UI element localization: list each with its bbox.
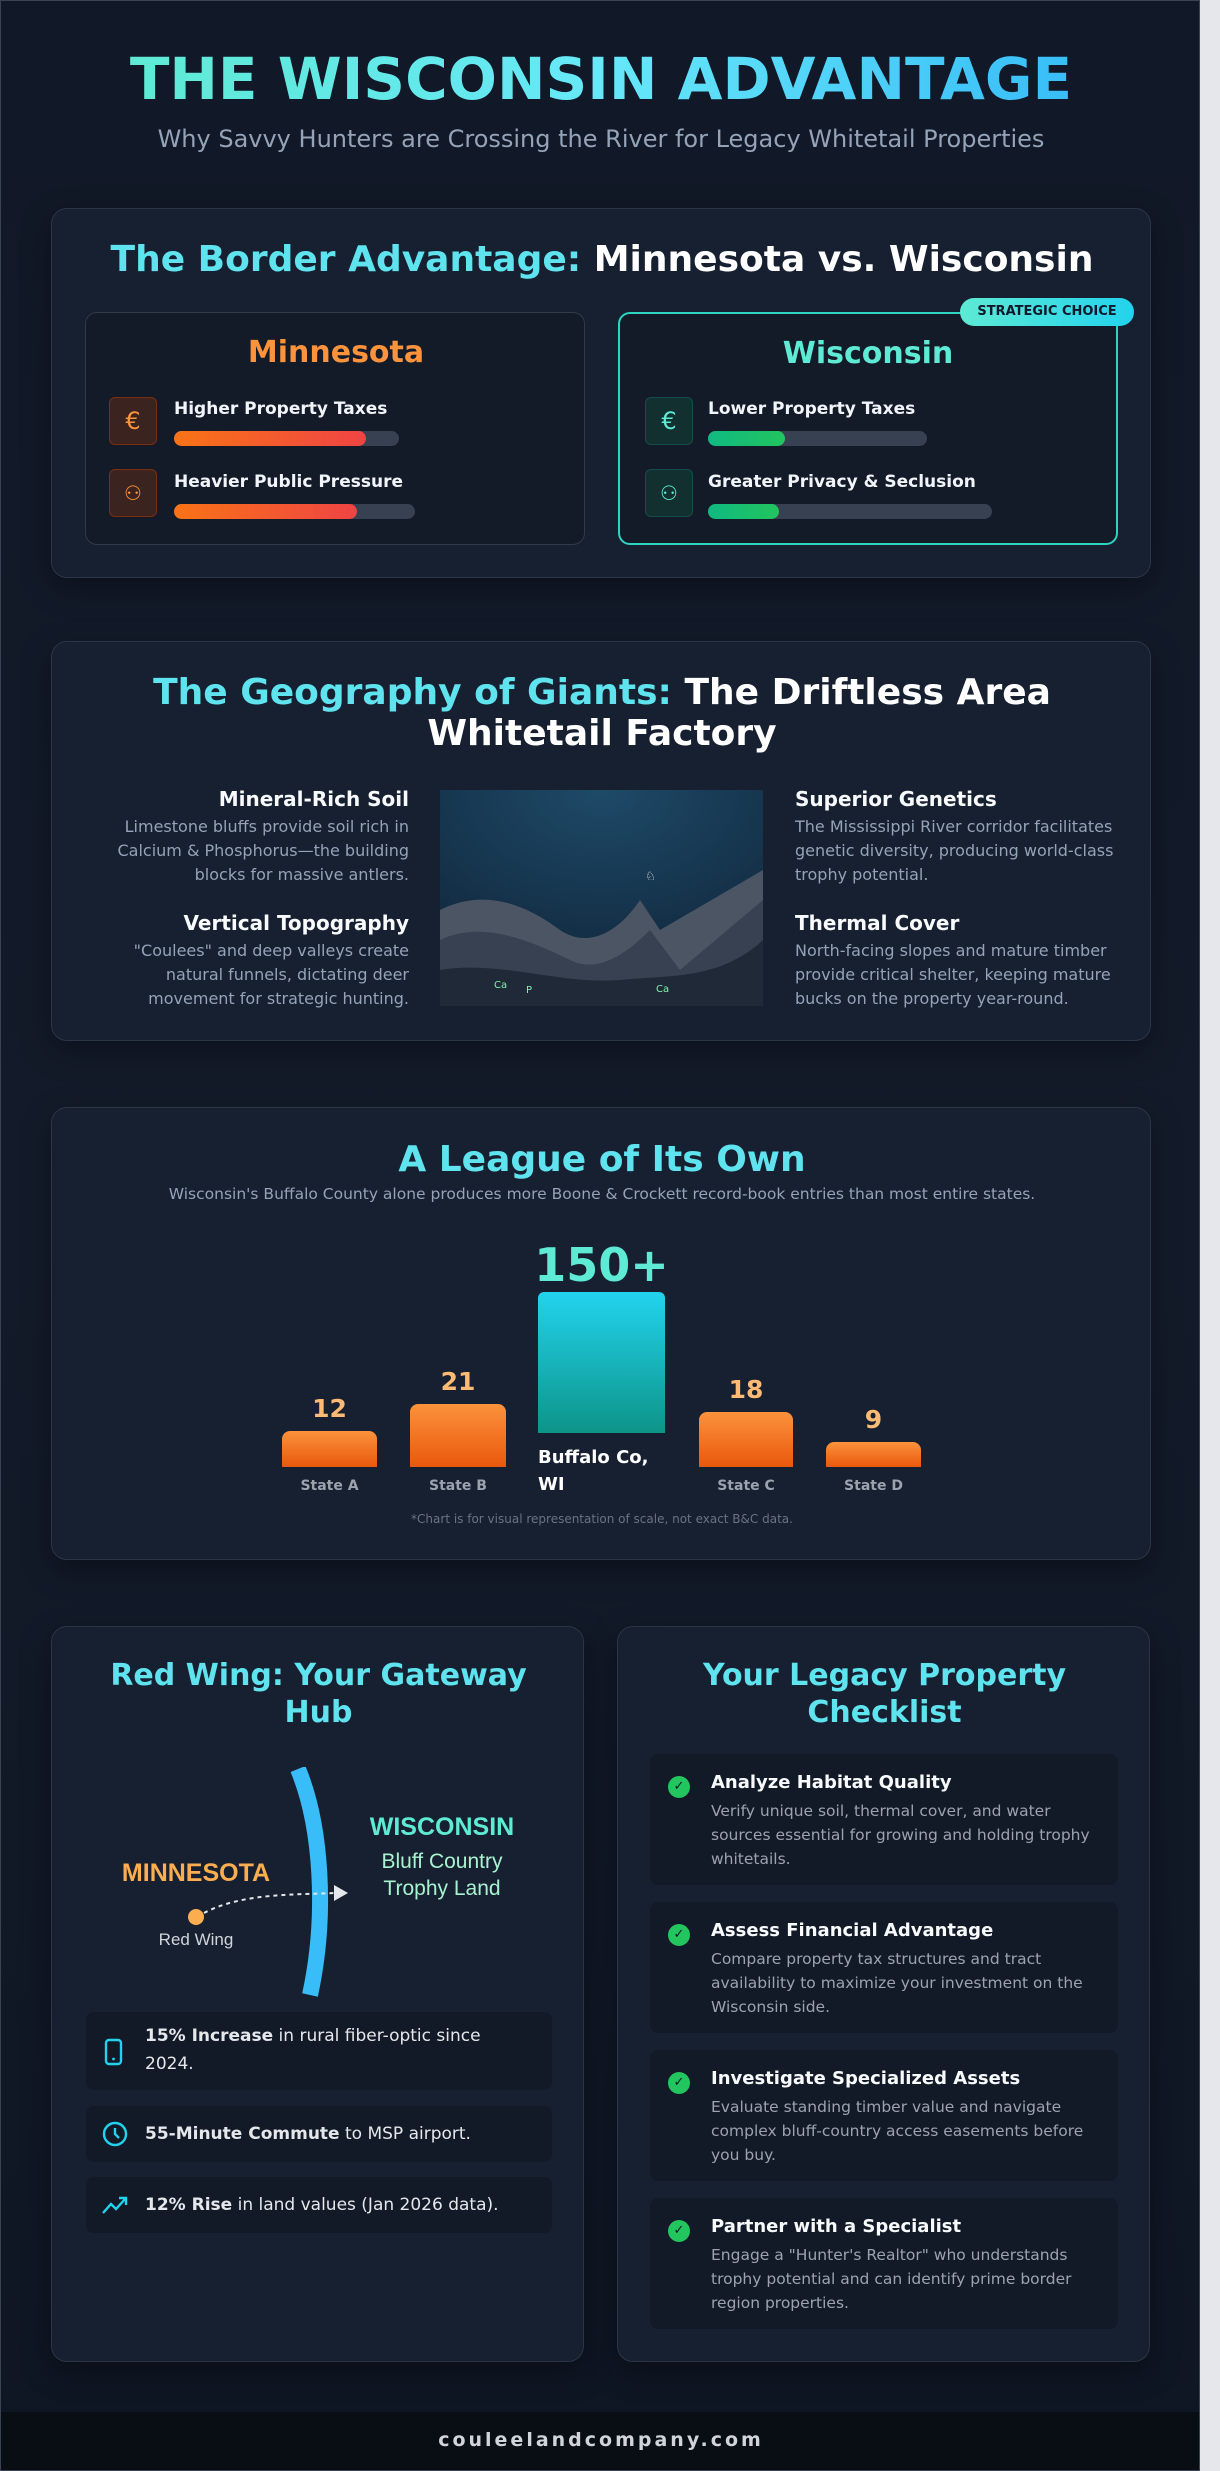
illustration: driftless terrain: ♘ (645, 869, 656, 883)
bar chart: State D (844, 1478, 903, 1494)
icon: euro (645, 397, 693, 445)
item: assets: Investigate Specialized Assets (711, 2068, 1020, 2089)
row: higher taxes: Higher Property Taxes (174, 399, 387, 419)
bar chart: 21 (441, 1367, 475, 1396)
panel: red wing (51, 1626, 584, 2362)
stat: commute: 55-Minute Commute to MSP airport. (145, 2124, 471, 2144)
icon: phone (104, 2038, 122, 2066)
item: specialist: Partner with a Specialist (711, 2216, 961, 2237)
stat: land values (86, 2177, 552, 2233)
illustration: driftless terrain (440, 790, 763, 1006)
badge: strategic choice: STRATEGIC CHOICE (977, 304, 1117, 319)
item: financial (650, 1902, 1118, 2033)
item: financial: Assess Financial Advantage (711, 1920, 993, 1941)
bar chart: 150+ (534, 1238, 669, 1292)
subtitle: league: Wisconsin's Buffalo County alone produces more Boone & Crockett record-book entries than most entire states. (169, 1185, 1035, 1203)
stat: fiber optic: 15% Increase in rural fiber-optic since 2024. (145, 2026, 481, 2074)
map: river crossing: Red Wing (159, 1930, 233, 1949)
icon: people: ⚇ (124, 481, 142, 505)
badge: strategic choice (960, 298, 1134, 326)
row: public pressure (174, 472, 415, 519)
panel: league of its own (51, 1107, 1151, 1560)
panel: geography (51, 641, 1151, 1041)
row: lower taxes (708, 399, 927, 446)
bar chart: 12 (312, 1394, 347, 1423)
heading: geography (153, 672, 1051, 754)
heading: border advantage: The Border Advantage: Minnesota vs. Wisconsin (111, 239, 1093, 280)
bar chart: 18 (729, 1375, 763, 1404)
heading: league: A League of Its Own (398, 1139, 806, 1180)
bar chart: Buffalo Co, (538, 1447, 648, 1468)
stat: land values: 12% Rise in land values (Jan 2026 data). (145, 2195, 499, 2215)
map: river crossing: MINNESOTA (122, 1859, 270, 1887)
heading: geography: Whitetail Factory (427, 713, 777, 754)
feature: genetics: Superior Genetics (795, 787, 997, 811)
row: privacy (708, 472, 992, 519)
card: minnesota (85, 312, 585, 545)
footnote: *Chart is for visual representation of scale, not exact B&C data. (411, 1512, 793, 1526)
bar chart: State B (429, 1478, 487, 1494)
item: habitat: Verify unique soil, thermal cover, and water sources essential for growing and holding trophy whitetails. (711, 1802, 1090, 1868)
item: specialist: Engage a "Hunter's Realtor" who understands trophy potential and can identify prime border region properties. (711, 2246, 1072, 2312)
item: financial: ✓ (674, 1927, 684, 1942)
item: financial: Compare property tax structures and tract availability to maximize your investment on the Wisconsin side. (711, 1950, 1083, 2016)
heading: wisconsin: Wisconsin (783, 336, 953, 371)
icon: people (109, 469, 157, 517)
icon: euro: € (661, 407, 677, 435)
feature: topography: "Coulees" and deep valleys create natural funnels, dictating deer movement for strategic hunting. (134, 941, 409, 1008)
map: river crossing (122, 1767, 514, 1997)
feature: mineral soil: Mineral-Rich Soil (219, 787, 409, 811)
panel: border advantage (51, 208, 1151, 578)
feature: thermal cover: Thermal Cover (795, 911, 959, 935)
icon: clock (102, 2122, 128, 2146)
feature: mineral soil (117, 787, 409, 884)
map: river crossing: WISCONSIN (370, 1813, 514, 1841)
footer: couleelandcompany.com (438, 2429, 764, 2451)
row: lower taxes: Lower Property Taxes (708, 399, 915, 419)
heading: minnesota: Minnesota (248, 335, 424, 370)
bar chart: State C (717, 1478, 775, 1494)
feature: thermal cover (795, 911, 1111, 1008)
row: public pressure: Heavier Public Pressure (174, 472, 403, 492)
item: habitat: Analyze Habitat Quality (711, 1772, 952, 1793)
icon: euro (109, 397, 157, 445)
card: wisconsin (618, 312, 1118, 545)
map: river crossing: Bluff Country (381, 1850, 503, 1873)
bar chart: WI (538, 1474, 565, 1495)
icon: people: ⚇ (660, 481, 678, 505)
item: habitat: ✓ (674, 1779, 684, 1794)
stat: commute (86, 2106, 552, 2162)
item: habitat (650, 1754, 1118, 1885)
feature: mineral soil: Limestone bluffs provide soil rich in Calcium & Phosphorus—the building blocks for massive antlers. (117, 817, 409, 884)
illustration: driftless terrain: Ca (494, 980, 507, 991)
row: higher taxes (174, 399, 399, 446)
heading: checklist: Your Legacy Property Checklist (703, 1658, 1066, 1730)
icon: euro: € (125, 407, 141, 435)
footer (1, 2412, 1201, 2471)
illustration: driftless terrain: Ca (656, 984, 669, 995)
heading: red wing: Red Wing: Your Gateway Hub (110, 1658, 527, 1730)
illustration: driftless terrain: P (526, 985, 532, 996)
bar chart: 9 (865, 1405, 882, 1434)
subtitle: Why Savvy Hunters are Crossing the River for Legacy Whitetail Properties (158, 125, 1044, 153)
item: assets: ✓ (674, 2075, 684, 2090)
feature: genetics (794, 787, 1113, 884)
title: THE WISCONSIN ADVANTAGE (130, 45, 1072, 113)
feature: genetics: The Mississippi River corridor facilitates genetic diversity, producing world-class trophy potential. (795, 817, 1113, 884)
feature: topography: Vertical Topography (184, 911, 409, 935)
item: specialist: ✓ (674, 2223, 684, 2238)
stat: fiber optic (86, 2012, 552, 2090)
row: privacy: Greater Privacy & Seclusion (708, 472, 976, 492)
icon: people (645, 469, 693, 517)
item: assets: Evaluate standing timber value and navigate complex bluff-country access easements before you buy. (711, 2098, 1083, 2164)
panel: checklist (617, 1626, 1150, 2362)
item: assets (650, 2050, 1118, 2181)
map: river crossing: Trophy Land (383, 1877, 501, 1900)
bar chart (282, 1238, 921, 1495)
feature: topography (134, 911, 409, 1008)
icon: trend (102, 2196, 128, 2214)
item: specialist (650, 2198, 1118, 2329)
heading: geography: The Geography of Giants: The Driftless Area (153, 672, 1051, 713)
bar chart: State A (300, 1478, 359, 1494)
feature: thermal cover: North-facing slopes and mature timber provide critical shelter, keeping mature bucks on the property year-round. (795, 941, 1111, 1008)
